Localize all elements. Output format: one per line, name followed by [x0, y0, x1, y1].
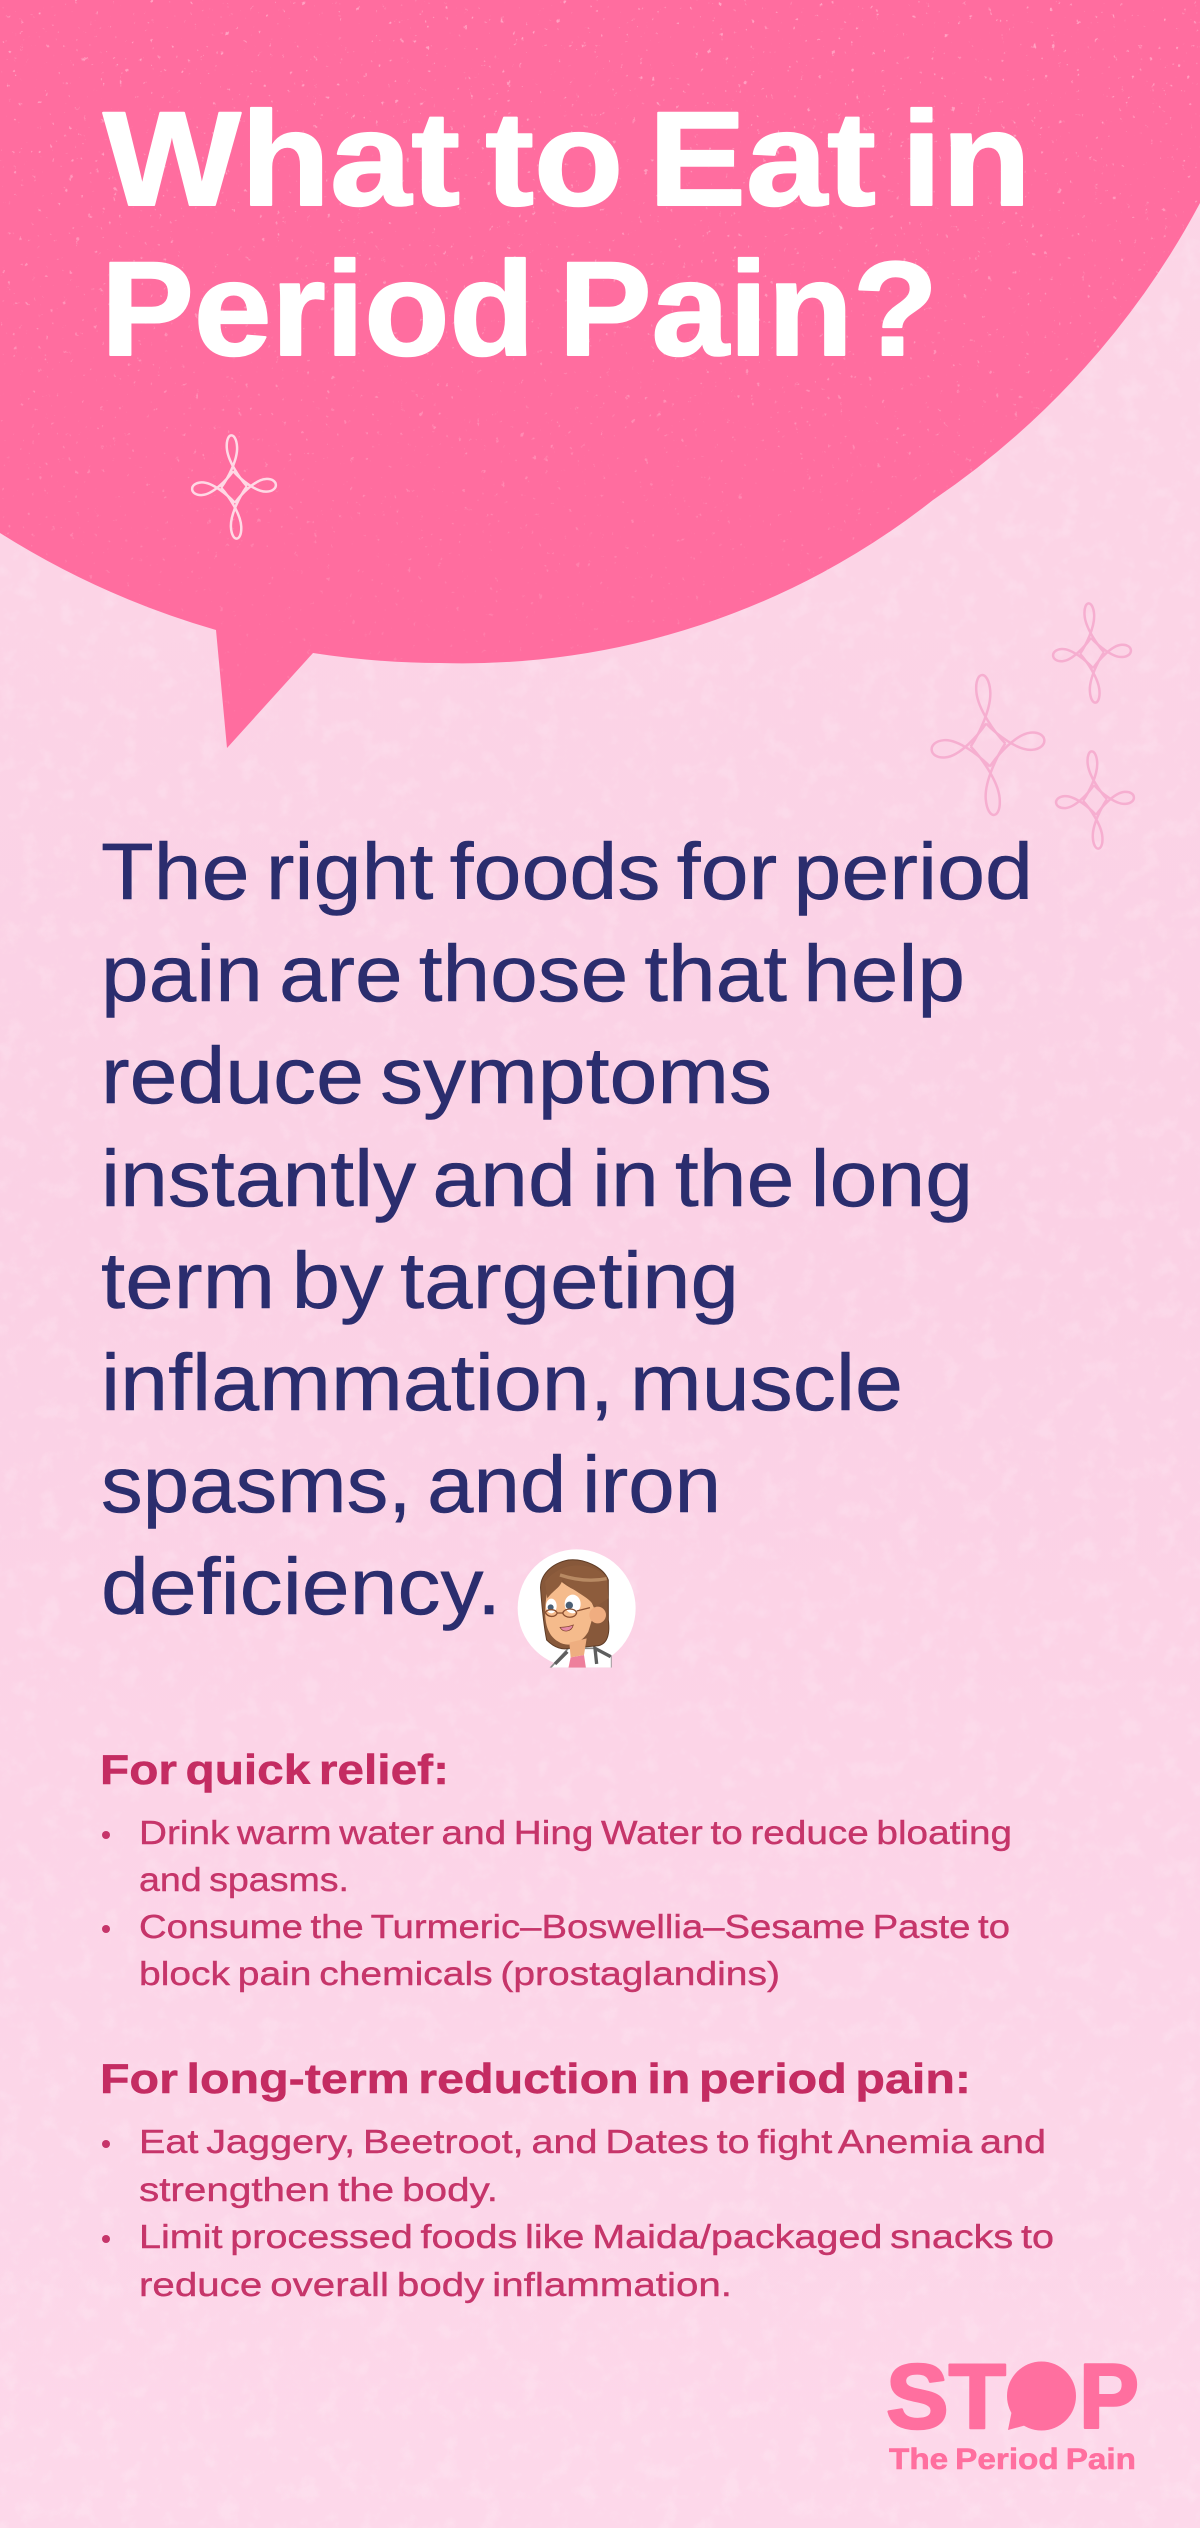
list: long-term items: Eat Jaggery, Beetroot, and Dates to fight Anemia and: [139, 2123, 1046, 2160]
title: [101, 85, 1031, 384]
intro text: inflammation, muscle: [101, 1338, 903, 1427]
list: long-term items: strengthen the body.: [139, 2171, 498, 2208]
intro text: term by targeting: [101, 1236, 739, 1325]
intro text: instantly and in the long: [101, 1134, 973, 1223]
logo: Stop The Period Pain: [886, 2346, 1139, 2476]
logo: Stop The Period Pain: ST: [886, 2346, 1006, 2448]
icon: doctor avatar: [518, 1549, 636, 1668]
title: What to Eat in: [103, 85, 1031, 234]
intro text: deficiency.: [101, 1542, 501, 1631]
intro text: The right foods for period: [101, 827, 1033, 916]
heading: quick relief: For quick relief:: [100, 1746, 449, 1793]
title: Period Pain?: [101, 235, 938, 384]
list: long-term items: Limit processed foods like Maida/packaged snacks to: [139, 2218, 1054, 2255]
list: long-term items: [102, 2123, 1054, 2303]
list: quick relief items: Drink warm water and Hing Water to reduce bloating: [139, 1814, 1012, 1851]
intro text: reduce symptoms: [101, 1031, 772, 1120]
heading: long-term reduction: For long-term reduction in period pain:: [100, 2055, 971, 2102]
section: quick relief: [100, 1746, 1012, 1992]
intro text: pain are those that help: [101, 929, 965, 1018]
intro text: [101, 827, 1033, 1631]
icon: sparkle cluster: [926, 601, 1137, 851]
logo: Stop The Period Pain: The Period Pain: [889, 2443, 1136, 2476]
list: quick relief items: [102, 1814, 1012, 1992]
list: quick relief items: block pain chemicals (prostaglandins): [139, 1955, 780, 1992]
list: quick relief items: Consume the Turmeric–Boswellia–Sesame Paste to: [139, 1908, 1010, 1945]
section: long-term reduction: [100, 2055, 1054, 2303]
intro text: spasms, and iron: [101, 1440, 721, 1529]
icon: sparkle on bubble: [189, 433, 279, 541]
list: quick relief items: and spasms.: [139, 1861, 349, 1898]
list: long-term items: reduce overall body inflammation.: [139, 2266, 732, 2303]
speech bubble header: [0, 0, 1200, 760]
logo: Stop The Period Pain: P: [1079, 2346, 1139, 2448]
